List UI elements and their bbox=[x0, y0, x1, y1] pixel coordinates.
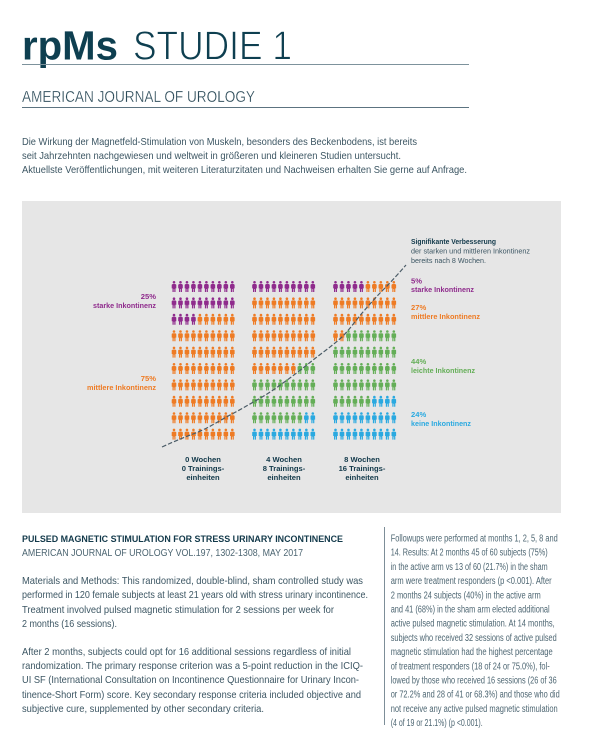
article text: criteria: UI SF (International Consultation on Incontinence Questionnaire for Urinary Incon- bbox=[22, 675, 359, 686]
right label: 24% none: 24% bbox=[411, 410, 426, 419]
article text: criteria: tinence-Short Form) score. Key secondary response criteria included objective and bbox=[22, 690, 361, 701]
pictogram column: 4 Wochen bbox=[252, 281, 315, 440]
article text: methods: Treatment involved pulsed magnetic stimulation for 2 sessions per week for bbox=[22, 605, 334, 616]
right label: 44% light bbox=[411, 357, 475, 375]
article text: results column: of treatment responders (18 of 24 or 75.0%), fol- bbox=[391, 661, 550, 672]
column caption: 8 Wochen: einheiten bbox=[345, 473, 379, 482]
left label: 25% severe bbox=[93, 292, 156, 310]
right label: 27% moderate: mittlere Inkontinenz bbox=[411, 312, 480, 321]
right label: 24% none bbox=[411, 410, 471, 428]
callout: significant improvement: Signifikante Verbesserung bbox=[411, 237, 496, 246]
article text: results column bbox=[391, 534, 560, 729]
column caption: 0 Wochen: einheiten bbox=[186, 473, 220, 482]
right label: 5% severe: starke Inkontinenz bbox=[411, 285, 474, 294]
title: STUDIE 1 bbox=[133, 22, 292, 68]
article heading: PULSED MAGNETIC STIMULATION FOR STRESS URINARY INCONTINENCE bbox=[22, 534, 344, 545]
callout: significant improvement bbox=[411, 237, 530, 265]
article text: criteria: randomization. The primary response criterion was a 5-point reduction in the ICIQ- bbox=[22, 661, 363, 672]
intro text: Aktuellste Veröffentlichungen, mit weiteren Literaturzitaten und Nachweisen erhalten Sie gerne auf Anfrage. bbox=[22, 165, 467, 176]
right label: 27% moderate: 27% bbox=[411, 303, 426, 312]
pictogram column: 0 Wochen bbox=[172, 281, 235, 440]
panel: infographic bbox=[22, 201, 561, 513]
article text: results column: active pulsed magnetic stimulation. At 14 months, bbox=[391, 619, 555, 630]
panel background bbox=[22, 201, 561, 513]
left label: 75% moderate: mittlere Inkontinenz bbox=[87, 383, 156, 392]
left label: 75% moderate bbox=[87, 374, 156, 392]
article text: criteria: After 2 months, subjects could opt for 16 additional sessions regardless of initial bbox=[22, 647, 351, 658]
article text: results column: in the active arm vs 13 of 60 (21.7%) in the sham bbox=[391, 562, 548, 573]
intro text: seit Jahrzehnten nachgewiesen und weltweit in größeren und kleineren Studien untersucht. bbox=[22, 151, 401, 162]
right label: 44% light: leichte Inkontinenz bbox=[411, 366, 475, 375]
column caption: 0 Wochen: 0 Trainings- bbox=[182, 464, 225, 473]
column caption: 4 Wochen: 8 Trainings- bbox=[263, 464, 306, 473]
article text: results column: magnetic stimulation had the highest percentage bbox=[391, 647, 553, 658]
article text: methods: 2 months (16 sessions). bbox=[22, 619, 117, 630]
right label: 5% severe bbox=[411, 276, 474, 294]
left label: 25% severe: 25% bbox=[141, 292, 156, 301]
article text: methods bbox=[22, 576, 368, 630]
column caption: 8 Wochen bbox=[339, 455, 386, 482]
column caption: 4 Wochen: einheiten bbox=[267, 473, 301, 482]
article text: criteria bbox=[22, 647, 363, 715]
article text: results column: 2 months 24 subjects (40%) in the active arm bbox=[391, 590, 541, 601]
right label: 24% none: keine Inkontinenz bbox=[411, 419, 471, 428]
column caption: 4 Wochen bbox=[263, 455, 306, 482]
column caption: 8 Wochen: 16 Trainings- bbox=[339, 464, 386, 473]
column caption: 0 Wochen: 0 Wochen bbox=[185, 455, 221, 464]
pictogram column: 8 Wochen bbox=[333, 281, 396, 440]
left label: 25% severe: starke Inkontinenz bbox=[93, 301, 156, 310]
column caption: 8 Wochen: 8 Wochen bbox=[344, 455, 380, 464]
subtitle: AMERICAN JOURNAL OF UROLOGY bbox=[22, 89, 256, 106]
title: rpMs bbox=[22, 22, 118, 68]
dashed trend curve bbox=[162, 265, 406, 447]
left label: 75% moderate: 75% bbox=[141, 374, 156, 383]
article text: results column: 14. Results: At 2 months 45 of 60 subjects (75%) bbox=[391, 548, 548, 559]
right label: 5% severe: 5% bbox=[411, 276, 422, 286]
article text: criteria: subjective cure, supplemented by other secondary criteria. bbox=[22, 704, 264, 715]
intro text bbox=[22, 137, 467, 176]
column caption: 4 Wochen: 4 Wochen bbox=[266, 455, 302, 464]
article text: methods: Materials and Methods: This randomized, double-blind, sham controlled study was bbox=[22, 576, 363, 587]
article text: results column: (4 of 19 or 21.1%) (p <0.001). bbox=[391, 718, 483, 729]
article text: results column: arm were treatment responders (p <0.001). After bbox=[391, 576, 552, 587]
callout: significant improvement: bereits nach 8 Wochen. bbox=[411, 256, 486, 265]
article text: methods: performed in 120 female subjects at least 21 years old with stress urinary incontinence. bbox=[22, 590, 368, 601]
right label: 44% light: 44% bbox=[411, 357, 426, 366]
article text: results column: and 41 (68%) in the sham arm elected additional bbox=[391, 604, 550, 616]
title bbox=[22, 22, 292, 68]
article citation: AMERICAN JOURNAL OF UROLOGY VOL.197, 1302-1308, MAY 2017 bbox=[22, 548, 303, 559]
intro text: Die Wirkung der Magnetfeld-Stimulation von Muskeln, besonders des Beckenbodens, ist bereits bbox=[22, 137, 417, 148]
callout: significant improvement: der starken und mittleren Inkontinenz bbox=[411, 246, 530, 256]
column caption: 0 Wochen bbox=[182, 455, 225, 482]
right label: 27% moderate bbox=[411, 303, 480, 321]
